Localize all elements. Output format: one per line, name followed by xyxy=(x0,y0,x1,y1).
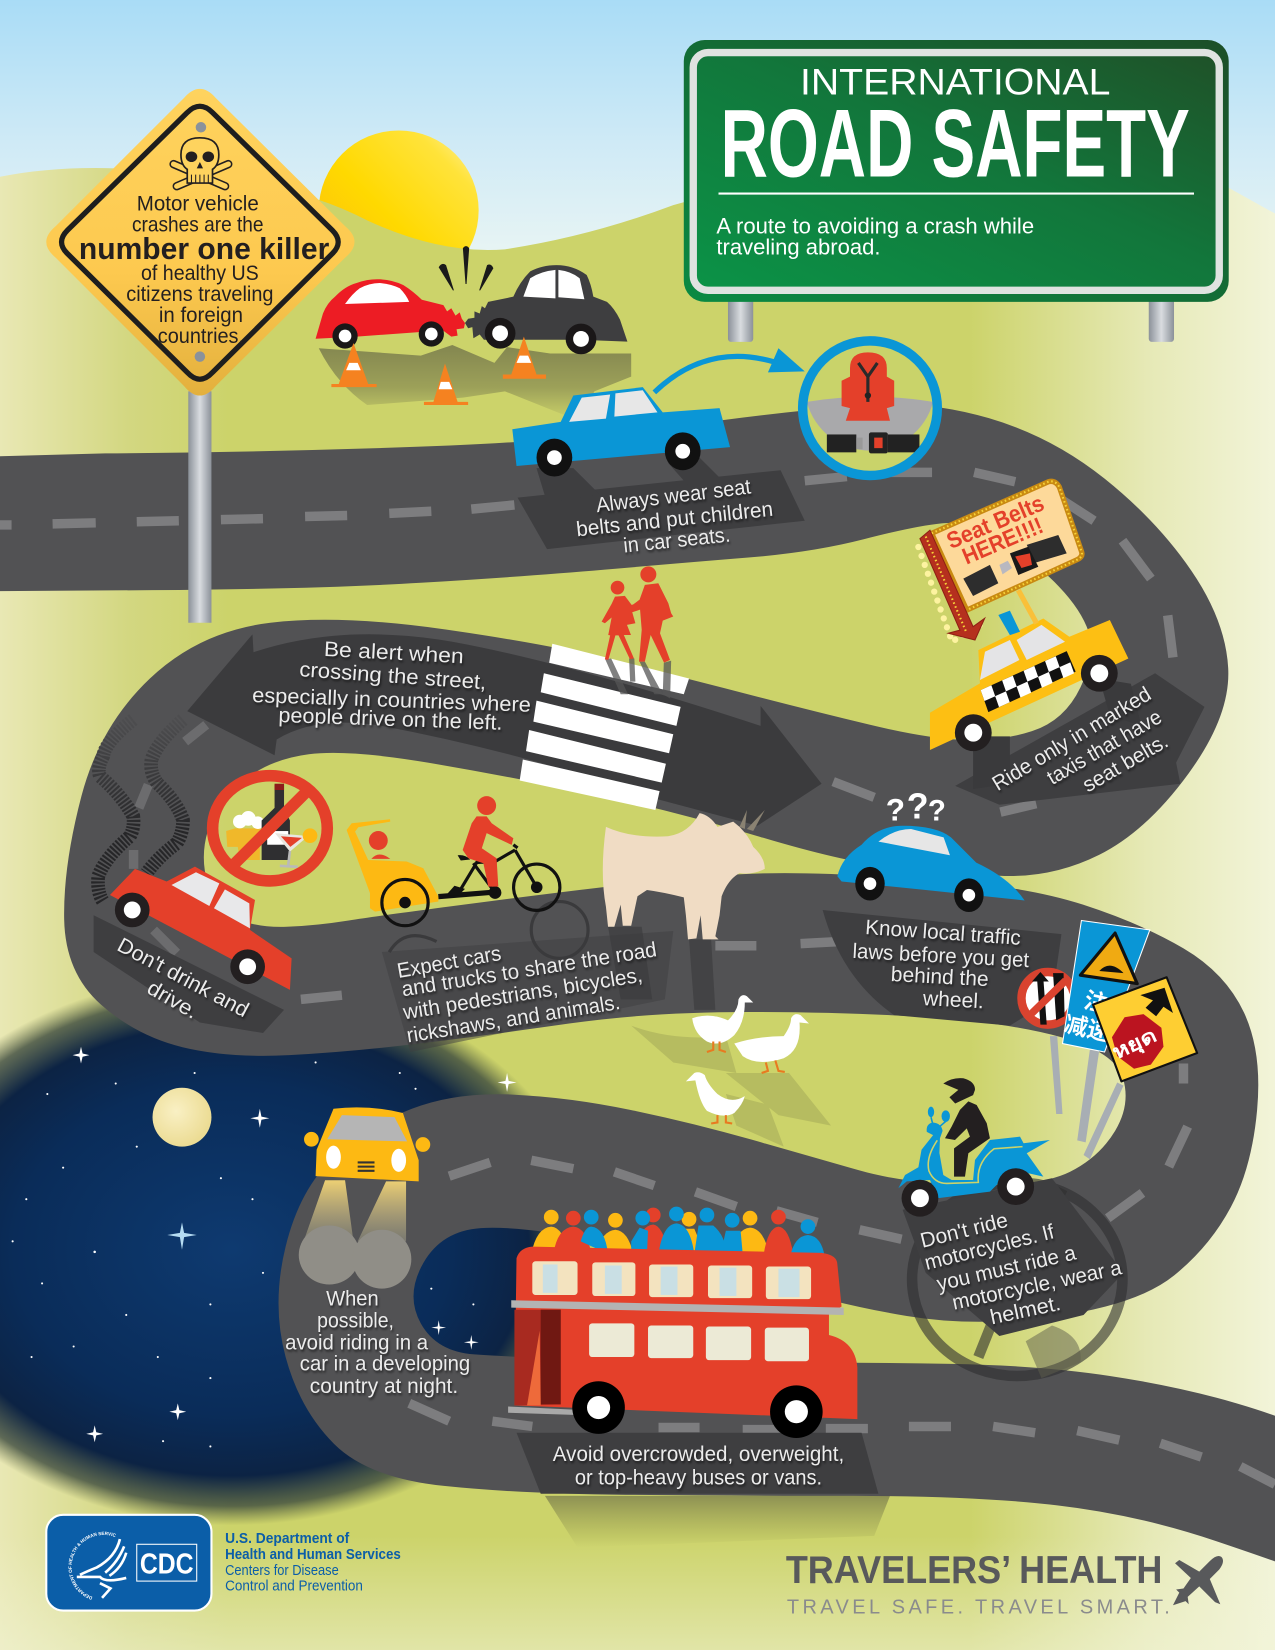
lower windows xyxy=(589,1323,809,1361)
warning diamond sign xyxy=(46,89,355,623)
yellow car front xyxy=(304,1107,430,1181)
sign title: traveling abroad. xyxy=(716,235,881,260)
caption text: wheel. xyxy=(921,987,985,1013)
sign text: of healthy US xyxy=(141,262,259,285)
rickshaw and cyclist xyxy=(347,796,560,926)
child seat and belt circle xyxy=(803,341,937,475)
CDC HHS logo xyxy=(45,1514,212,1612)
share the road tip xyxy=(347,796,765,1052)
road signs cluster: 注 xyxy=(1082,987,1110,1017)
caption text xyxy=(918,1209,1124,1329)
caption plate xyxy=(955,673,1205,805)
traffic cones xyxy=(331,337,546,405)
bus ground shadow xyxy=(545,1496,890,1547)
caption text: rickshaws, and animals. xyxy=(405,991,622,1047)
caption plate xyxy=(903,1178,1124,1336)
crash scene xyxy=(316,246,631,421)
rickshaw shadow xyxy=(389,902,588,958)
sign text: crashes are the xyxy=(132,213,264,236)
scooter shadow xyxy=(1026,1325,1081,1378)
black car xyxy=(465,265,627,354)
impact lines xyxy=(439,246,493,290)
geese xyxy=(631,995,831,1147)
sign title xyxy=(716,62,1194,260)
caption text: with pedestrians, bicycles, xyxy=(401,964,644,1024)
caption plate xyxy=(823,910,1061,1026)
moon xyxy=(153,1088,211,1147)
caption text: motorcycle, wear a xyxy=(950,1256,1124,1315)
caption text: Know local traffic xyxy=(865,916,1021,950)
goose 3 xyxy=(686,1072,745,1123)
road centre dashes xyxy=(0,472,1275,1484)
drink and drive tip xyxy=(94,720,327,1033)
tyre tracks xyxy=(98,720,183,902)
caption plate xyxy=(94,915,284,1033)
caption text: Expect cars xyxy=(395,942,503,983)
caption text: When xyxy=(326,1287,379,1310)
sky background xyxy=(0,0,1275,316)
question marks: ? xyxy=(928,795,946,828)
caption text xyxy=(252,638,531,735)
caption text: car in a developing xyxy=(300,1353,470,1376)
cow shadow xyxy=(608,927,715,1010)
bus tip xyxy=(508,1207,890,1547)
bottom pale fade xyxy=(0,1536,1275,1650)
night sky xyxy=(0,974,594,1525)
sign title: INTERNATIONAL xyxy=(800,62,1110,103)
caption text: helmet. xyxy=(988,1292,1063,1329)
caption text xyxy=(395,938,658,1047)
HHS seal xyxy=(68,1532,128,1600)
taxi car xyxy=(930,611,1128,751)
stars xyxy=(12,1047,517,1447)
travelers health brand: TRAVEL SAFE. TRAVEL SMART. xyxy=(787,1597,1170,1619)
goose 1 xyxy=(692,995,753,1052)
crash ground shadow xyxy=(319,345,631,421)
seat belts here sign: Seat Belts xyxy=(943,490,1048,554)
headlight pools xyxy=(299,1226,411,1289)
seat belt tip xyxy=(512,341,937,558)
travelers health brand: TRAVELERS’ HEALTH xyxy=(786,1549,1162,1592)
caption text: Ride only in marked xyxy=(988,683,1155,796)
HHS and CDC names xyxy=(225,1531,401,1595)
upper windows xyxy=(532,1261,811,1299)
diamond board xyxy=(46,89,355,396)
HHS and CDC names: Control and Prevention xyxy=(225,1579,363,1595)
wheel shadow xyxy=(973,679,1141,789)
caption text xyxy=(852,916,1030,1013)
question marks: ? xyxy=(886,792,905,828)
steering shadow ring xyxy=(912,1182,1122,1376)
goose 2 xyxy=(734,1014,809,1073)
sign text: countries. xyxy=(158,325,244,348)
sign title: A route to avoiding a crash while xyxy=(716,214,1034,239)
caption text: in car seats. xyxy=(622,524,731,558)
caption plate xyxy=(517,1433,878,1494)
caption text: avoid riding in a xyxy=(285,1332,428,1355)
caption text: belts and put children xyxy=(575,498,774,541)
travelers health brand xyxy=(786,1549,1223,1619)
question marks xyxy=(886,786,946,828)
question marks: ? xyxy=(907,786,929,826)
sign text: number one killer xyxy=(79,232,329,266)
caption text xyxy=(575,475,774,558)
HHS and CDC names: Health and Human Services xyxy=(225,1547,401,1563)
no alcohol sign xyxy=(213,776,327,881)
caption text: Don't ride xyxy=(918,1209,1010,1253)
caption plate xyxy=(518,470,805,549)
CDC wordmark: CDC xyxy=(140,1549,194,1581)
HHS and CDC names: U.S. Department of xyxy=(225,1531,349,1547)
pedestrian shadows xyxy=(605,659,671,699)
caption text: drive. xyxy=(143,976,202,1024)
sign board xyxy=(684,40,1229,302)
caption text: Always wear seat xyxy=(595,475,752,517)
HHS seal: DEPARTMENT OF HEALTH & HUMAN SERVICES USA xyxy=(68,1532,116,1600)
plane icon xyxy=(1173,1556,1223,1605)
blue car xyxy=(512,387,730,477)
caption text: taxis that have xyxy=(1043,706,1166,790)
crosswalk tip xyxy=(187,566,822,826)
wheel shadows xyxy=(537,458,726,503)
caption plate xyxy=(382,931,673,1052)
red car xyxy=(110,867,292,990)
caption text: Be alert when xyxy=(323,638,464,668)
road signs cluster: 减速 xyxy=(1062,1011,1113,1046)
pedestrians xyxy=(602,566,673,663)
headlight beams xyxy=(305,1180,406,1241)
caption text xyxy=(285,1287,470,1398)
traffic laws tip xyxy=(823,786,1197,1159)
caption text: Don't drink and xyxy=(113,934,252,1022)
motorcycle tip xyxy=(898,1078,1124,1378)
caption text xyxy=(553,1443,844,1489)
blue car xyxy=(837,826,1025,912)
sign posts xyxy=(728,298,1174,342)
sign text: in foreign xyxy=(159,304,243,327)
caption text: motorcycles. If xyxy=(922,1220,1057,1275)
caption text: seat belts. xyxy=(1079,730,1172,797)
caption text: or top-heavy buses or vans. xyxy=(575,1466,822,1489)
road safety sign xyxy=(684,40,1229,342)
double-headed arrow panel xyxy=(187,634,822,826)
caption text: country at night. xyxy=(310,1375,458,1398)
night driving tip xyxy=(285,1107,470,1398)
caption text: you must ride a xyxy=(935,1241,1078,1296)
scooter xyxy=(898,1107,1050,1217)
caption text: Avoid overcrowded, overweight, xyxy=(553,1443,844,1466)
winding road xyxy=(0,404,1275,1573)
zebra crossing xyxy=(520,644,689,810)
goose shadows xyxy=(631,1026,831,1147)
caption text: and trucks to share the road xyxy=(400,938,658,1001)
cow xyxy=(603,810,765,939)
caption text: laws before you get xyxy=(852,940,1030,972)
caption text: especially in countries where xyxy=(252,684,531,717)
road signs cluster: หยุด xyxy=(1109,1025,1161,1065)
rooftop passengers xyxy=(531,1207,825,1257)
caption text: behind the xyxy=(890,963,989,991)
double decker bus xyxy=(508,1247,857,1438)
sign post xyxy=(188,391,211,623)
red car xyxy=(316,279,465,349)
seat belts here sign xyxy=(918,481,1082,642)
seat belts here sign: HERE!!!! xyxy=(958,512,1047,569)
sign text: Motor vehicle xyxy=(137,192,259,215)
caption text: people drive on the left. xyxy=(278,704,503,735)
rider xyxy=(943,1078,990,1177)
HHS and CDC names: Centers for Disease xyxy=(225,1563,339,1579)
sun xyxy=(319,130,479,290)
skull icon xyxy=(174,138,228,186)
caption text: possible, xyxy=(317,1310,394,1333)
sign text xyxy=(79,192,329,348)
blue arrow xyxy=(654,348,805,392)
checker band xyxy=(981,651,1076,712)
sign text: citizens traveling xyxy=(126,283,274,306)
caption text: crossing the street, xyxy=(299,658,487,694)
taxi tip xyxy=(918,481,1205,805)
road signs cluster xyxy=(1021,920,1197,1159)
